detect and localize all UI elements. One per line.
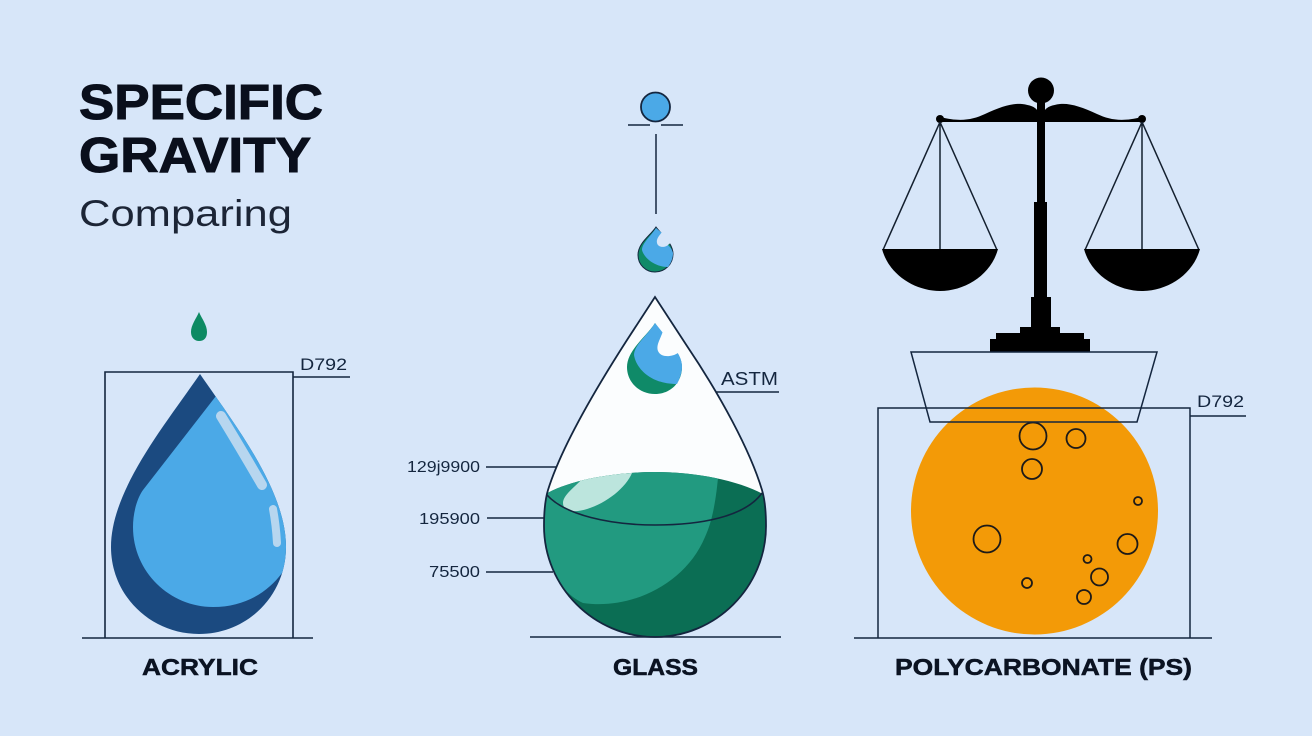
label: D792: D792 bbox=[300, 355, 347, 374]
left pan with strings bbox=[882, 122, 998, 291]
green liquid bbox=[544, 472, 766, 636]
subheading: comparing: Comparing bbox=[79, 193, 292, 234]
right pan with strings bbox=[1084, 122, 1200, 291]
icon: blue sphere on stand bbox=[628, 92, 683, 125]
polycarbonate bounding box and ground line bbox=[854, 408, 1246, 638]
title block bbox=[79, 76, 323, 234]
connector line bbox=[655, 134, 657, 214]
ground line bbox=[530, 636, 781, 638]
heading: specific gravity: SPECIFIC bbox=[79, 76, 323, 130]
glass drop vessel bbox=[535, 297, 775, 645]
leader lines bbox=[486, 392, 779, 572]
panel: acrylic bbox=[82, 312, 350, 680]
icon: falling droplet bbox=[638, 227, 673, 272]
icon: balance scale bbox=[882, 78, 1200, 352]
panel: polycarbonate bbox=[854, 78, 1246, 680]
label: glass: GLASS bbox=[613, 654, 698, 680]
panel: glass bbox=[407, 92, 781, 680]
scale column and stepped base bbox=[990, 100, 1090, 352]
label: polycarbonate (PS): POLYCARBONATE (PS) bbox=[895, 654, 1192, 680]
scale knob bbox=[1028, 78, 1054, 104]
trapezoid platform bbox=[911, 352, 1157, 422]
scale value bottom: 75500 bbox=[429, 564, 480, 581]
label: acrylic: ACRYLIC bbox=[142, 654, 258, 680]
icon: small green drop bbox=[191, 312, 207, 341]
scale beam bbox=[940, 104, 1142, 122]
heading: specific gravity bbox=[79, 76, 323, 183]
heading: specific gravity: GRAVITY bbox=[79, 129, 311, 183]
scale value middle: 195900 bbox=[419, 511, 480, 528]
icon: droplet inside vessel bbox=[627, 323, 682, 394]
scale value top: 129j9900 bbox=[407, 459, 480, 476]
label: D792: D792 bbox=[1197, 392, 1244, 411]
icon: acrylic water drop bbox=[111, 374, 295, 634]
label: ASTM: ASTM bbox=[721, 369, 778, 389]
orange sphere with bubbles bbox=[911, 388, 1158, 634]
acrylic bounding box and ground line bbox=[82, 372, 350, 638]
infographic canvas bbox=[80, 78, 1246, 680]
